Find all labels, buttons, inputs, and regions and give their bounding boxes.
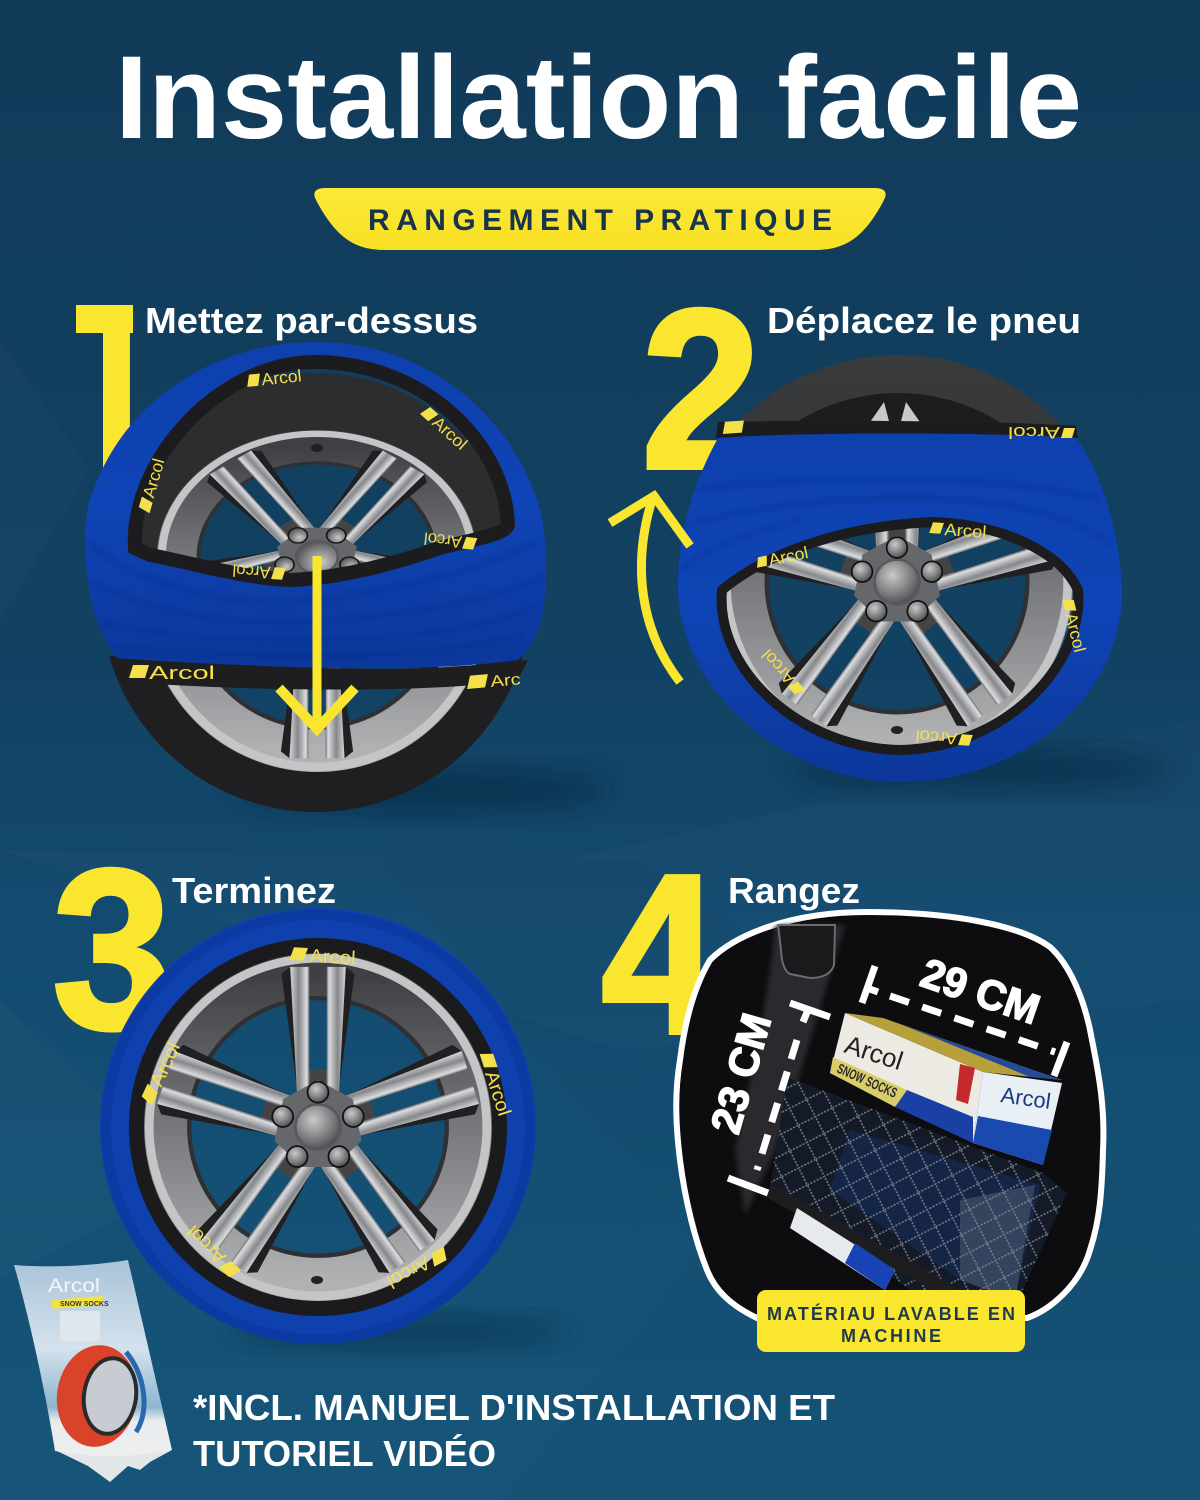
upper rim and tyre (142, 373, 501, 573)
step 1 number: 1 (62, 248, 162, 560)
leaflet (790, 1208, 895, 1290)
storage photo panel (676, 912, 1103, 1352)
logos: Arcol (767, 543, 810, 570)
arrow down (279, 556, 355, 729)
logos: Arcol (428, 413, 471, 454)
box: SNOW SOCKS (835, 1060, 900, 1101)
tyre lower (109, 656, 523, 812)
logos: Arcol (149, 663, 215, 683)
logos: Arcol (309, 946, 356, 969)
logos: Arcol (261, 366, 302, 389)
fabric sock (85, 342, 546, 668)
manual note line 2: TUTORIEL VIDÉO (193, 1433, 496, 1474)
step 3 number: 3 (52, 823, 172, 1077)
sock (115, 923, 521, 1329)
step 1 number (76, 305, 133, 468)
label 23 cm: 23 CM (701, 1008, 780, 1138)
logos: Arcol (915, 726, 958, 748)
sock edge bottom (114, 658, 528, 690)
boot handle (778, 925, 835, 978)
manual booklet: SNOW SOCKS (60, 1301, 109, 1308)
logos: Arcol (147, 1039, 185, 1090)
subtitle banner (314, 188, 886, 250)
manual booklet (14, 1260, 172, 1482)
logos: Arcol (423, 529, 463, 551)
rim (726, 528, 1073, 745)
logos: Arcol (480, 1068, 514, 1119)
subtitle banner: RANGEMENT PRATIQUE (368, 204, 832, 237)
black band (139, 948, 497, 1306)
net pocket (771, 1078, 1067, 1292)
step 1 heading: Mettez par-dessus (145, 300, 478, 341)
top sock edge (716, 421, 1078, 438)
step 2 wheel (673, 355, 1170, 805)
fabric folds (88, 540, 545, 656)
label 29 cm: 29 CM (915, 949, 1046, 1033)
rim (149, 958, 487, 1296)
logos (138, 945, 514, 1292)
bottom strap (765, 1184, 960, 1290)
step 3 wheel (106, 915, 570, 1348)
dimension height 23 cm (728, 1003, 830, 1193)
step 1 wheel (85, 342, 610, 812)
manual booklet: Arcol (48, 1276, 100, 1297)
box (830, 1013, 1062, 1165)
step 3 heading: Terminez (172, 870, 336, 911)
step 4 heading: Rangez (728, 870, 860, 911)
logos (722, 420, 1089, 749)
box: Arcol (999, 1082, 1052, 1114)
logos (129, 366, 521, 693)
washable badge (757, 1290, 1025, 1352)
manual note line 1: *INCL. MANUEL D'INSTALLATION ET (193, 1387, 835, 1428)
fabric sock (678, 432, 1122, 782)
step 2 heading: Déplacez le pneu (767, 300, 1081, 341)
logos: Arcol (183, 1220, 231, 1268)
arrow up curved (610, 496, 690, 682)
washable badge: MATÉRIAU LAVABLE EN (767, 1303, 1015, 1324)
carpet band (735, 925, 845, 1215)
logos: Arcol (1061, 611, 1089, 654)
fabric folds (682, 480, 1112, 570)
logos: Arc (490, 671, 521, 691)
logos: Arcol (758, 645, 799, 688)
logos: Arcol (232, 560, 271, 582)
step 2 number: 2 (641, 263, 761, 517)
tyre top (739, 355, 1061, 425)
opening edge (722, 522, 1078, 750)
logos: Arcol (944, 520, 987, 542)
dimension width 29 cm (862, 966, 1067, 1076)
sock edge top (135, 362, 508, 580)
title: Installation facile (115, 32, 1082, 164)
box: Arcol (841, 1029, 907, 1076)
logos: Arcol (1008, 423, 1060, 442)
washable badge: MACHINE (841, 1326, 941, 1346)
logos: Arcol (139, 456, 169, 500)
step 4 number: 4 (601, 828, 719, 1082)
logos: Arcol (383, 1251, 433, 1292)
